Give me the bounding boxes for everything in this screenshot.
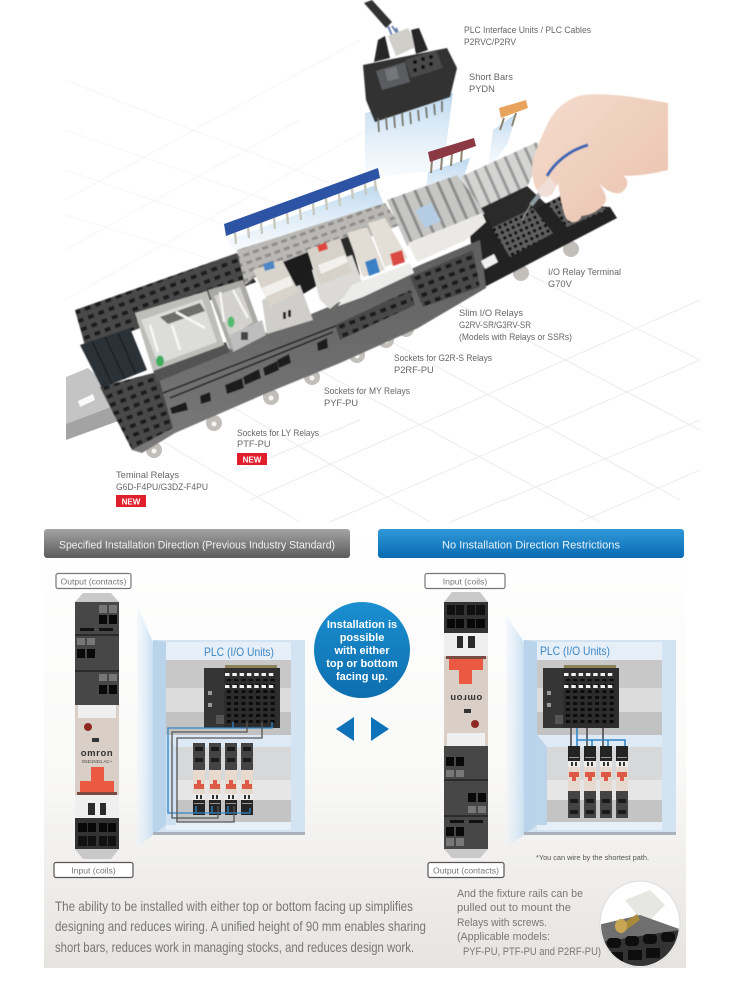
NEW badge: LY sockets [237,453,267,465]
left tag: input: Input (coils) [71,866,116,876]
transparent relay one [135,291,224,371]
short bar: blue [224,168,380,244]
black I/O relay terminal base [470,188,617,291]
right relay [444,592,488,858]
rotated relay brand: omron [450,692,482,703]
right socket block [410,250,480,307]
gray socket band [237,203,400,285]
white relay five [347,227,385,277]
description text: designing and reduces wiring. A unified height of 90 mm enables sharing [55,918,426,934]
right tag: input: Input (coils) [443,576,487,586]
label: slim I/O relays: G2RV-SR/G3RV-SR [459,320,531,330]
white short bar teeth [408,213,486,262]
small relays [193,743,253,815]
perspective floor grid [65,40,700,522]
hand shape [532,94,668,222]
label: terminal relays: Teminal Relays [116,470,179,480]
short bar: orange [499,100,528,130]
label: terminal relays: G6D-F4PU/G3DZ-F4PU [116,482,208,492]
heading: no restrictions: No Installation Direction Restrictions [442,540,620,552]
left cabinet [153,640,305,835]
DIN rail [66,368,135,440]
white relay three [253,260,299,307]
heading: previous standard [44,529,350,558]
left tag: output [56,574,131,588]
mounting tabs [146,241,579,458]
translucent slim relays [460,142,543,210]
label: sockets for MY relays: PYF-PU [324,398,358,408]
rear dark socket row [75,253,256,346]
heading: no restrictions [378,529,684,558]
label: sockets for MY relays: Sockets for MY Relays [324,386,410,396]
front left terminals [100,372,173,450]
middle socket holes [335,290,415,340]
terminal block two [547,187,607,227]
NEW badge: LY sockets: NEW [243,456,262,464]
front sockets [170,338,328,414]
arrow: right [371,717,389,741]
right tag: output: Output (contacts) [433,866,499,876]
screwdriver shaft [522,204,531,220]
right light wedge [506,615,524,847]
terminal relay black block [80,328,147,388]
socket rail assembly [75,142,617,453]
NEW badge: terminal relays: NEW [122,498,141,506]
screw mounting photo [598,881,685,970]
body [363,48,457,122]
label: slim I/O relays: (Models with Relays or SSRs) [459,332,572,342]
left tag: input [54,862,133,878]
fixture rail note: PYF-PU, PTF-PU and P2RF-PU) [463,946,601,958]
callout circle [314,602,410,698]
footnote: *You can wire by the shortest path. [536,853,649,862]
callout circle: facing up. [336,671,388,683]
fixture rail note: And the fixture rails can be [457,888,583,900]
cabinet heading: PLC (I/O Units) [204,645,274,659]
OUT tag [481,254,498,269]
label: PLC interface units: P2RVC/P2RV [464,37,517,47]
white relay six [368,218,408,267]
fixture rail note: Relays with screws. [457,917,547,929]
label: sockets for LY relays: Sockets for LY Relays [237,428,319,438]
short wiring [571,728,625,754]
black upper strip [481,186,545,232]
front lower body [132,240,486,453]
left tag: output: Output (contacts) [61,576,127,586]
black gap between relays [283,252,318,296]
right tag: input [425,574,505,588]
NEW badge: terminal relays [116,495,146,507]
light shafts [228,93,517,254]
arrow: left [336,717,354,741]
fingernail [537,177,556,197]
label: sockets for G2R-S relays: P2RF-PU [394,365,434,375]
white relay three skirt [262,285,313,334]
long wiring [168,722,272,822]
small relays, rotated [568,746,628,818]
cable [364,0,392,28]
callout circle: possible [340,632,384,644]
left relay: G6D1ND1 AC~ [82,759,113,764]
label: short bars: PYDN [469,84,495,94]
callout circle: with either [333,645,390,657]
terminal block one [492,208,553,257]
front seam lines [163,292,412,398]
description text: The ability to be installed with either top or bottom facing up simplifies [55,898,413,914]
slim I/O relays [387,175,487,246]
right cabinet [524,640,676,835]
relay brand: omron [81,748,113,759]
short bar: red [428,138,476,173]
label: I/O relay terminal: G70V [548,279,573,289]
PLC unit [543,665,619,728]
label: sockets for LY relays: PTF-PU [237,439,271,449]
pins [378,101,442,132]
right tag: output [428,862,504,878]
callout circle: top or bottom [326,658,398,670]
transparent relay two [208,280,260,350]
relay skirt under transparent relays [153,342,230,382]
white relay four [307,238,352,285]
hand holding screwdriver [522,94,668,222]
PLC unit [204,665,280,728]
cabinet heading: PLC (I/O Units) [540,644,610,658]
fixture rail note: pulled out to mount the [457,902,571,914]
label: sockets for G2R-S relays: Sockets for G2R-S Relays [394,353,492,363]
PLC interface unit and cable [363,0,457,132]
label: short bars: Short Bars [469,72,513,82]
description text: short bars, reduces work in managing stocks, and reduces design work. [55,939,414,955]
fixture rail note: (Applicable models: [457,931,550,943]
panel: installation comparison background [44,525,686,968]
white relay four skirt [312,255,362,309]
label: slim I/O relays: Slim I/O Relays [459,308,523,318]
left light wedge [137,605,153,847]
white base under right relays [338,263,414,306]
callout circle: Installation is [327,619,397,631]
heading: previous standard: Specified Installation Direction (Previous Industry Standard) [59,540,335,552]
screwdriver handle [547,145,588,176]
left relay [75,593,119,859]
label: PLC interface units: PLC Interface Units / PLC Cables [464,25,591,35]
label: I/O relay terminal: I/O Relay Terminal [548,267,621,277]
